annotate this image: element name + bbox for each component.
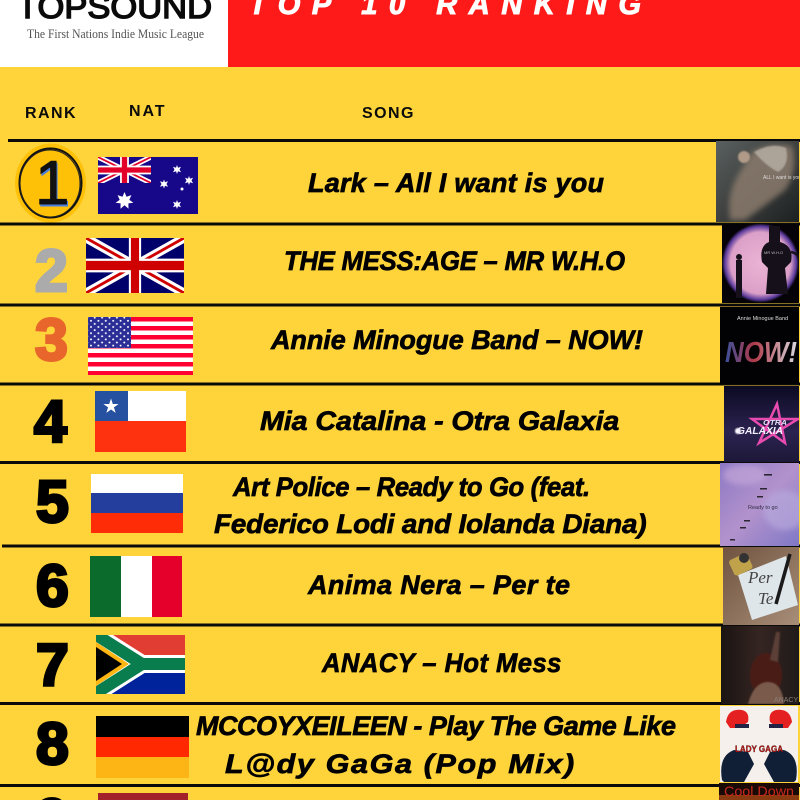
- song 2 title: THE MESS:AGE – MR W.H.O: [284, 245, 626, 276]
- flag: South Africa: [96, 635, 185, 694]
- rank 8: 8: [36, 711, 69, 777]
- song 6 title: Anima Nera – Per te: [307, 570, 570, 600]
- cover art 4: GALAXIA: [737, 426, 783, 437]
- panel: logo: [0, 0, 228, 67]
- flag: United Kingdom: [86, 238, 184, 293]
- rank 1 badge: 1: [36, 151, 70, 220]
- cover art 3: Annie Minogue Band: [737, 316, 788, 322]
- rank 4: 4: [34, 389, 67, 455]
- flag: Italy: [90, 556, 182, 617]
- song 5 title: [214, 471, 647, 539]
- rank 1 badge: 1: [35, 149, 69, 218]
- cover art 4: [724, 386, 799, 462]
- rank 3: 3: [35, 307, 68, 373]
- column header: rank: RANK: [25, 105, 77, 122]
- song 8 title: MCCOYXEILEEN - Play The Game Like: [196, 711, 676, 741]
- rank 5: 5: [36, 469, 69, 535]
- cover art 6: Per: [747, 568, 773, 587]
- song 1 title: Lark – All I want is you: [308, 168, 604, 198]
- song 7 title: ANACY – Hot Mess: [321, 647, 561, 678]
- cover art 8: LADY GAGA: [735, 744, 783, 754]
- cover art 2: MR W.H.O: [764, 250, 783, 255]
- cover art 5: [720, 463, 800, 546]
- flag: Chile: [95, 391, 186, 452]
- cover art 7: ANACY: [774, 697, 798, 704]
- song 5 title: Art Police – Ready to Go (feat.: [232, 471, 590, 502]
- flag: Australia: [98, 157, 198, 214]
- cover art 9: Cool Down: [724, 783, 794, 799]
- column header: song: SONG: [362, 105, 415, 122]
- cover art 2: [722, 224, 799, 303]
- cover art 8: [720, 706, 798, 782]
- cover art 4: OTRA: [763, 420, 787, 427]
- logo tagline: The First Nations Indie Music League: [27, 27, 204, 41]
- song 8 title: L@dy GaGa (Pop Mix): [225, 750, 574, 780]
- song 3 title: Annie Minogue Band – NOW!: [270, 325, 643, 355]
- song 4 title: Mia Catalina - Otra Galaxia: [260, 406, 619, 436]
- song 8 title: [196, 711, 676, 780]
- song 5 title: Federico Lodi and Iolanda Diana): [214, 508, 647, 539]
- cover art 5: Ready to go: [748, 505, 778, 511]
- cover art 1: [716, 141, 800, 222]
- rank 2: 2: [35, 238, 68, 304]
- flag: Russia: [91, 474, 183, 533]
- panel: title banner: [228, 0, 800, 67]
- cover art 1: ALL I want is you: [763, 175, 800, 181]
- flag: Germany: [96, 716, 189, 778]
- rank 1 badge: [15, 144, 86, 222]
- rank 7: 7: [36, 632, 69, 698]
- cover art 7: [721, 626, 799, 704]
- cover art 3: [720, 307, 799, 384]
- flag: Latvia: [98, 793, 188, 800]
- rank 6: 6: [36, 553, 69, 619]
- flag: United States: [88, 317, 193, 375]
- cover art 6: [723, 547, 799, 625]
- column header: nationality: NAT: [129, 103, 166, 120]
- cover art 6: Te: [758, 589, 774, 608]
